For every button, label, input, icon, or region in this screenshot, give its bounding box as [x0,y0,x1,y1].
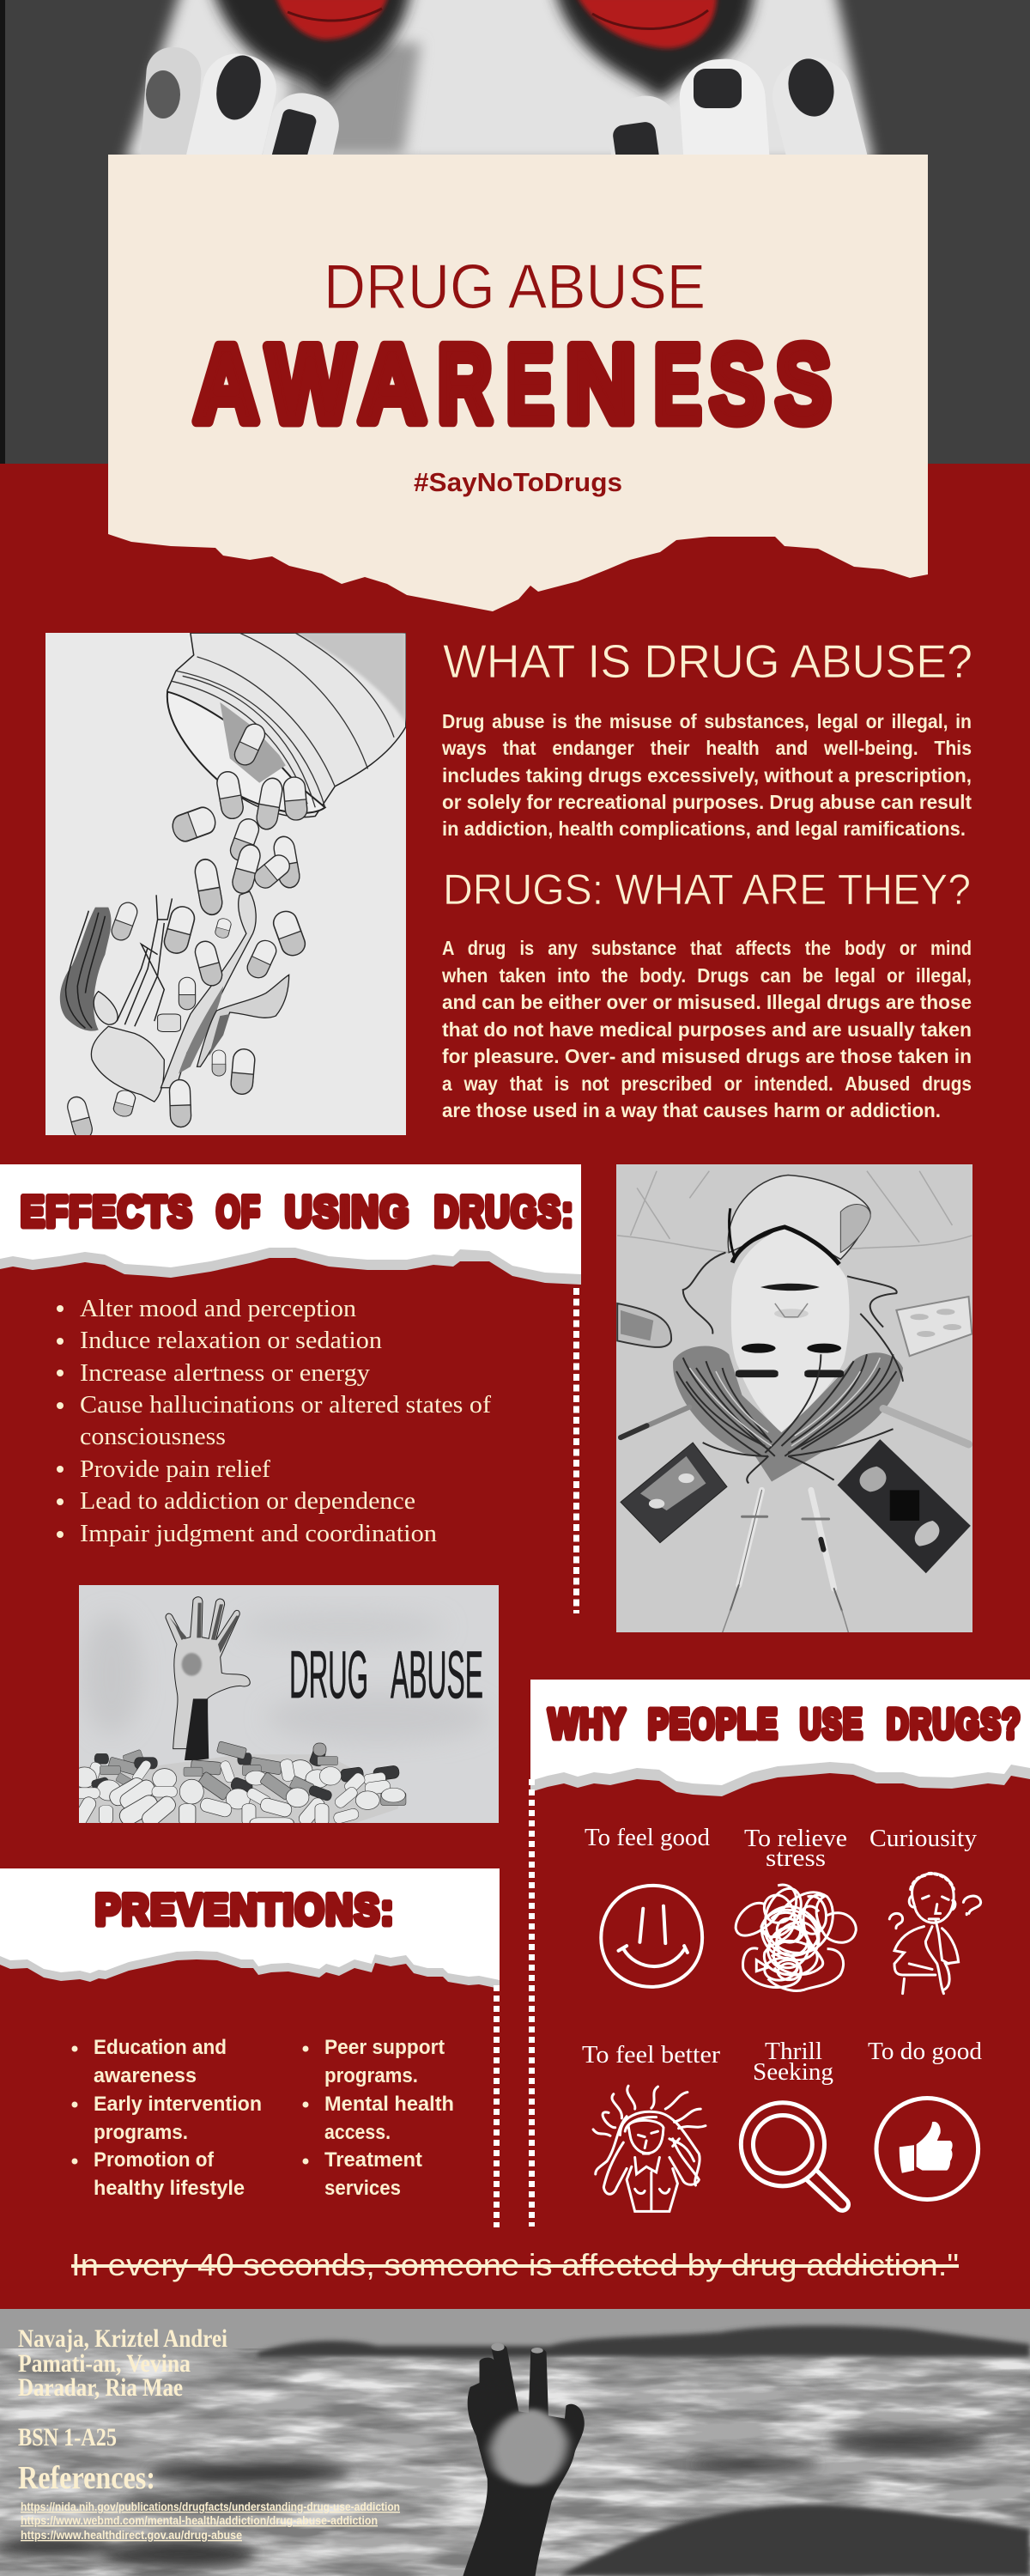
list: preventions left column: healthy lifestyle [94,2177,245,2200]
list: effects: Cause hallucinations or altered states of [80,1391,491,1419]
title line: AWARENESS: S [776,323,831,445]
image caption: DRUG ABUSE [291,1650,482,1698]
reference links: https://nida.nih.gov/publications/drugfacts/understanding-drug-use-addiction [21,2500,400,2513]
list: preventions left column: awareness [94,2064,197,2087]
title card [108,155,928,611]
paragraph: what is drug abuse [441,710,972,840]
title line: DRUG ABUSE: DRUG ABUSE [324,252,706,322]
heading text: EFFECTS [21,1188,193,1236]
panel: reasons icons and labels [582,1825,982,2211]
list: preventions left column: Promotion of [94,2148,215,2172]
heading text: USING [285,1188,410,1236]
title line: AWARENESS: W [267,323,354,445]
label: to feel better: To feel better [582,2042,721,2069]
icon: stressed woman [593,2086,706,2211]
heading text: PREVENTIONS: [95,1886,395,1934]
icon: thumbs up in circle [876,2099,978,2199]
illustration: upside-down girl with pills, syringes and tapes [616,1164,972,1632]
banner: preventions [0,1868,500,1989]
list: preventions right column: access. [324,2121,391,2144]
title line: AWARENESS: N [566,323,636,445]
illustration: pills spilling from bottle onto falling figure [45,633,406,1141]
label: thrill seeking: Seeking [753,2059,833,2086]
icon: magnifying glass [741,2103,849,2210]
icon: curious thinking boy [889,1874,981,1994]
list: preventions right column: programs. [324,2064,418,2087]
banner: effects of using drugs [0,1164,581,1285]
image caption: DRUG ABUSE: DRUG [289,1637,368,1712]
illustration: hand rising from pile of pills with DRUG ABUSE [70,1585,499,1830]
heading: what is drug abuse: WHAT IS DRUG ABUSE? [443,635,972,688]
references heading: References: [18,2460,155,2496]
hashtag: #SayNoToDrugs [414,467,622,497]
icon: tangled scribble [736,1885,856,1990]
heading: drugs what are they: DRUGS: WHAT ARE THEY? [443,866,971,914]
heading text: WHY [548,1702,627,1747]
list: effects: Provide pain relief [80,1455,270,1483]
title line: AWARENESS: A [359,323,426,445]
title line: AWARENESS: E [654,323,701,445]
student names: Pamati-an, Vevina [18,2349,191,2378]
banner: why people use drugs [530,1680,1030,1796]
heading text: PEOPLE [648,1702,779,1747]
falling figure [60,908,112,1031]
list: effects: Increase alertness or energy [80,1359,371,1387]
list: effects: Induce relaxation or sedation [80,1327,383,1354]
paragraph: drugs definition: a way that is not prescribed or intended. Abused drugs [442,1072,972,1095]
heading text: USE [800,1702,863,1747]
paragraph: drugs definition: and can be either over or misused. Illegal drugs are those [442,991,972,1013]
heading text: DRUGS: [434,1188,574,1236]
paragraph: drugs definition: for pleasure. Over- and misused drugs are those taken in [442,1045,972,1067]
list: preventions right column: Mental health [324,2093,454,2116]
title line: AWARENESS: E [506,323,554,445]
paragraph: drugs definition: when taken into the body. Drugs can be legal or illegal, [441,964,972,987]
paragraph: drugs definition [441,937,972,1121]
label: to feel good: To feel good [585,1825,710,1851]
paragraph: what is drug abuse: Drug abuse is the misuse of substances, legal or illegal, in [442,710,972,732]
paragraph: drugs definition: that do not have medical purposes and are usually taken [442,1018,972,1041]
list: effects: Alter mood and perception [80,1295,357,1322]
list: preventions left column: Education and [94,2036,227,2059]
section code: BSN 1-A25 [18,2423,117,2451]
quote with strikethrough: In every 40 seconds, someone is affected by drug addiction." [71,2247,959,2282]
heading text: OF [216,1188,261,1236]
title line: AWARENESS: A [194,323,258,445]
title line: AWARENESS [194,323,831,445]
list: effects: consciousness [80,1423,226,1450]
list: preventions right column [302,2036,454,2200]
paragraph: what is drug abuse: ways that endanger their health and well-being. This [441,737,972,759]
list: preventions right column: Treatment [324,2148,422,2172]
student names: Navaja, Kriztel Andrei [18,2324,227,2353]
paragraph: drugs definition: are those used in a way that causes harm or addiction. [442,1099,941,1121]
header photo: face with red eyes and black nails [0,0,1030,464]
label: to relieve stress: To relieve [744,1826,847,1852]
paragraph: what is drug abuse: includes taking drugs excessively, without a prescription, [442,764,972,787]
title line: AWARENESS: S [710,323,764,445]
list: preventions right column: services [324,2177,401,2200]
label: to relieve stress: stress [766,1845,826,1872]
list: effects [57,1295,491,1547]
list: preventions right column: Peer support [324,2036,445,2059]
student names [18,2324,227,2402]
label: to do good: To do good [868,2038,982,2065]
reference links: https://www.webmd.com/mental-health/addiction/drug-abuse-addiction [21,2513,378,2527]
label: to relieve stress [744,1826,847,1872]
list: preventions left column: programs. [94,2121,188,2144]
heading text [548,1702,1021,1747]
reference links: https://www.healthdirect.gov.au/drug-abuse [21,2528,242,2542]
label: curiousity: Curiousity [869,1826,977,1852]
footer photo: hand reaching out of water [0,2309,1030,2576]
icon: smiley face [601,1886,702,1987]
label: thrill seeking: Thrill [765,2038,822,2065]
heading text [21,1188,574,1236]
reference links [21,2500,400,2542]
paragraph: what is drug abuse: or solely for recreational purposes. Drug abuse can result [442,791,972,813]
student names: Daradar, Ria Mae [18,2373,183,2402]
title line: AWARENESS: R [438,323,492,445]
paragraph: what is drug abuse: in addiction, health complications, and legal ramifications. [442,817,966,840]
list: effects: Impair judgment and coordination [80,1520,438,1547]
list: preventions left column: Early intervention [94,2093,262,2116]
text: ABUSE [391,1637,483,1712]
list: effects: Lead to addiction or dependence [80,1487,415,1515]
label: thrill seeking [753,2038,833,2086]
list: preventions left column [72,2036,262,2200]
